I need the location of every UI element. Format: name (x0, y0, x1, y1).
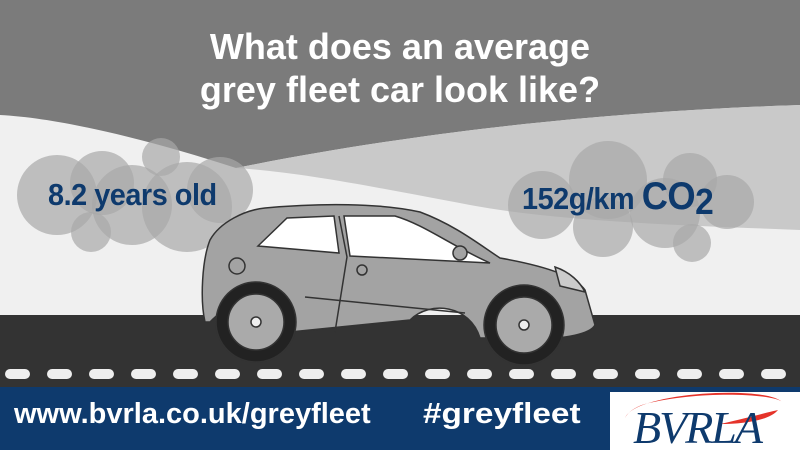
title: grey fleet car look like? (200, 69, 600, 110)
light grey wave (236, 105, 800, 230)
footer hashtag: #greyfleet (423, 398, 581, 430)
cloud: left (17, 138, 253, 252)
dark top band (0, 0, 800, 168)
footer bar (0, 387, 800, 450)
stat: CO2: 152g/km CO2 (522, 175, 713, 222)
stat: age: 8.2 years old (48, 177, 217, 212)
cloud: right (508, 141, 754, 262)
logo: BVRLA (625, 393, 782, 450)
title (200, 26, 600, 110)
footer url: www.bvrla.co.uk/greyfleet (14, 398, 371, 430)
car (202, 205, 595, 365)
road (0, 315, 800, 387)
title: What does an average (210, 26, 590, 67)
